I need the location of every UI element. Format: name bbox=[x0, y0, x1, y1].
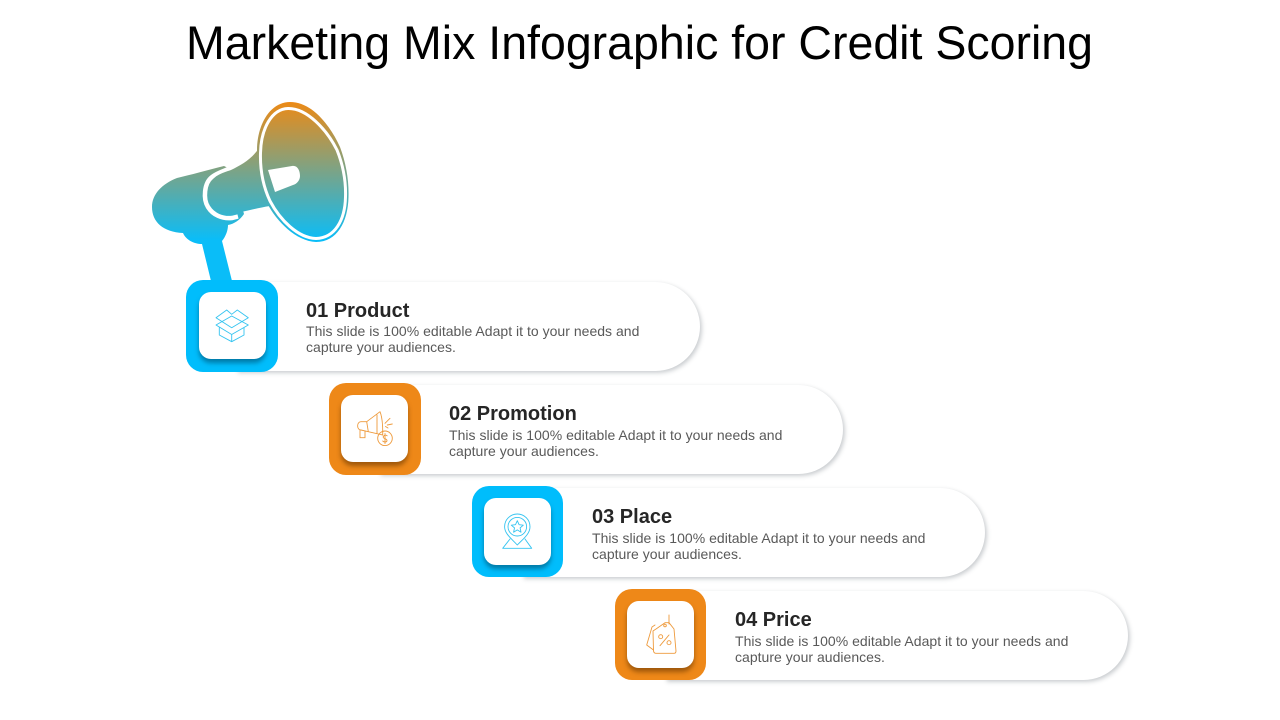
description bbox=[592, 530, 925, 562]
icon tile: price tags bbox=[615, 589, 706, 680]
heading: 02 Promotion bbox=[449, 403, 577, 425]
description: capture your audiences. bbox=[449, 443, 599, 459]
description bbox=[735, 633, 1068, 665]
description: This slide is 100% editable Adapt it to your needs and bbox=[449, 427, 782, 443]
description: capture your audiences. bbox=[306, 339, 456, 355]
card: 04 Price bbox=[615, 589, 1132, 684]
title: Marketing Mix Infographic for Credit Scoring bbox=[186, 16, 1093, 69]
description: This slide is 100% editable Adapt it to your needs and bbox=[592, 530, 925, 546]
icon tile: map pin bbox=[472, 486, 563, 577]
heading: 01 Product bbox=[306, 300, 409, 322]
icon: megaphone bbox=[152, 102, 349, 280]
icon tile: box bbox=[186, 280, 278, 372]
card background bbox=[522, 488, 985, 577]
card: 03 Place bbox=[472, 486, 989, 581]
description: This slide is 100% editable Adapt it to your needs and bbox=[735, 633, 1068, 649]
description: This slide is 100% editable Adapt it to your needs and bbox=[306, 323, 639, 339]
card background bbox=[665, 591, 1128, 680]
heading: 04 Price bbox=[735, 609, 812, 631]
card background bbox=[379, 385, 843, 474]
card background bbox=[236, 282, 700, 371]
card: 02 Promotion bbox=[329, 383, 847, 478]
description: capture your audiences. bbox=[592, 546, 742, 562]
description bbox=[306, 323, 639, 355]
icon tile: megaphone with dollar bbox=[329, 383, 421, 475]
description: capture your audiences. bbox=[735, 649, 885, 665]
heading: 03 Place bbox=[592, 506, 672, 528]
card: 01 Product bbox=[186, 280, 704, 375]
description bbox=[449, 427, 782, 459]
